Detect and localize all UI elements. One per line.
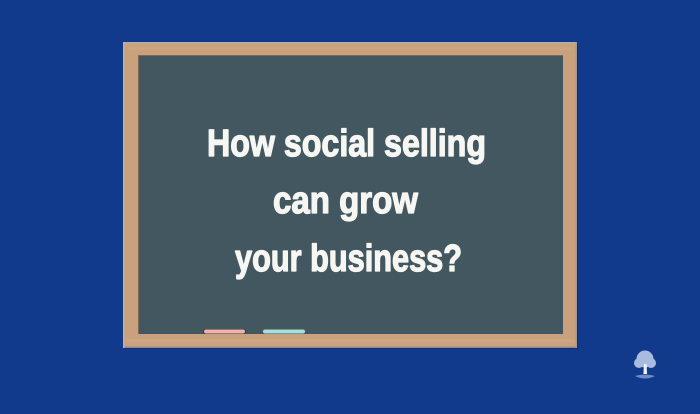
heading: can grow — [273, 180, 418, 222]
icon: tree logo — [634, 350, 656, 378]
tree canopy — [634, 350, 656, 368]
frame shadow — [125, 44, 578, 349]
heading: your business? — [235, 238, 462, 280]
wooden frame — [123, 42, 577, 348]
tree roots — [635, 374, 655, 378]
pink chalk — [203, 329, 246, 334]
heading: How social selling — [207, 123, 486, 165]
board surface — [138, 55, 563, 334]
blue chalk — [263, 329, 305, 334]
heading — [207, 123, 486, 280]
chalkboard — [123, 42, 578, 349]
tree trunk — [643, 364, 647, 374]
